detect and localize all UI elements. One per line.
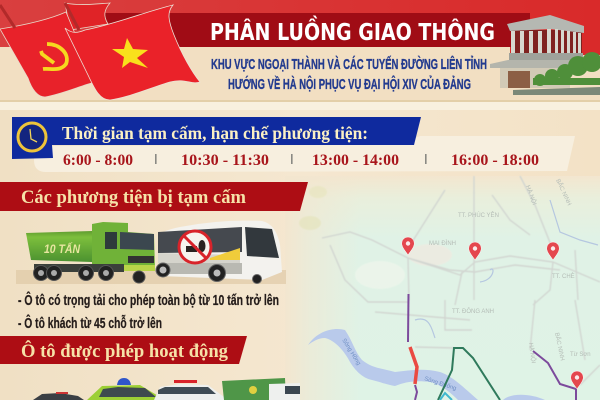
illustration: police car (154, 380, 228, 400)
illustration: mausoleum (490, 15, 600, 95)
time slots: 6:00 - 8:00 (63, 152, 133, 169)
route: green (438, 348, 500, 400)
pin 2 (469, 242, 481, 260)
hammer and sickle (41, 44, 67, 69)
banner: allowed vehicles: Ô tô được phép hoạt động (21, 340, 229, 362)
hours panel (34, 136, 575, 172)
illustration: garbage truck (222, 378, 300, 400)
map labels: TT. ĐÔNG ANH (452, 308, 494, 315)
banner: allowed vehicles (0, 336, 247, 364)
pin 3 (547, 242, 559, 260)
time heading: Thời gian tạm cấm, hạn chế phương tiện: (62, 123, 368, 143)
icon: no entry sign (179, 231, 211, 263)
map labels: BẮC NINH (553, 332, 567, 361)
header band (0, 0, 600, 110)
map labels: Từ Sơn (570, 352, 591, 358)
route: purple south (415, 385, 417, 400)
ground shadow (16, 270, 286, 284)
route: cyan (440, 393, 452, 400)
time slots (63, 152, 539, 169)
icon: clock (18, 123, 46, 151)
route: red segment (410, 347, 417, 384)
star (112, 38, 148, 68)
title ribbon (105, 13, 530, 47)
subtitle: HƯỚNG VỀ HÀ NỘI PHỤC VỤ ĐẠI HỘI XIV CỦA ĐẢNG (228, 75, 471, 93)
bullet list: - Ô tô khách từ 45 chỗ trở lên (18, 314, 162, 332)
map waterways (415, 200, 598, 338)
time ribbon (12, 117, 575, 172)
map labels: MAI ĐÌNH (429, 240, 456, 247)
bullet list: - Ô tô có trọng tải cho phép toàn bộ từ 10 tấn trở lên (18, 291, 279, 309)
map labels: TT. PHÚC YÊN (458, 211, 499, 219)
title: PHÂN LUỒNG GIAO THÔNG (210, 15, 495, 46)
map (285, 176, 600, 400)
time slots: 10:30 - 11:30 (181, 152, 269, 169)
truck label: 10 TẤN (44, 241, 80, 256)
map labels: Sông Đuống (423, 376, 457, 392)
icon: party flag (0, 3, 110, 97)
time slots: 16:00 - 18:00 (451, 152, 539, 169)
pin 1 (402, 237, 414, 255)
trees (533, 52, 600, 86)
route: purple north (407, 294, 410, 342)
map labels: HÀ NỘI (524, 184, 538, 206)
pin 4 (571, 371, 583, 389)
route: purple east (533, 351, 576, 400)
banner: banned vehicles: Các phương tiện bị tạm cấm (21, 188, 247, 208)
map roads (322, 176, 600, 385)
time slots: 13:00 - 14:00 (312, 152, 399, 169)
map labels: HÀ NỘI (527, 342, 537, 364)
subtitle (211, 55, 487, 93)
map patches (299, 186, 452, 289)
pin centres (406, 241, 579, 380)
illustration: dark car (33, 392, 84, 400)
map labels: TT. CHÈ (552, 273, 575, 280)
illustration: bus (156, 221, 282, 284)
lake (503, 395, 545, 400)
map labels: BẮC NINH (554, 177, 574, 207)
banner: banned vehicles (0, 182, 308, 211)
river (308, 329, 478, 400)
bullet list (18, 291, 279, 332)
illustration: green taxi (87, 378, 170, 400)
wheels (34, 266, 145, 283)
map labels (340, 177, 591, 392)
icon: national flag (65, 3, 200, 100)
map labels: Sông Hồng (340, 338, 361, 367)
illustration: truck (26, 222, 155, 283)
